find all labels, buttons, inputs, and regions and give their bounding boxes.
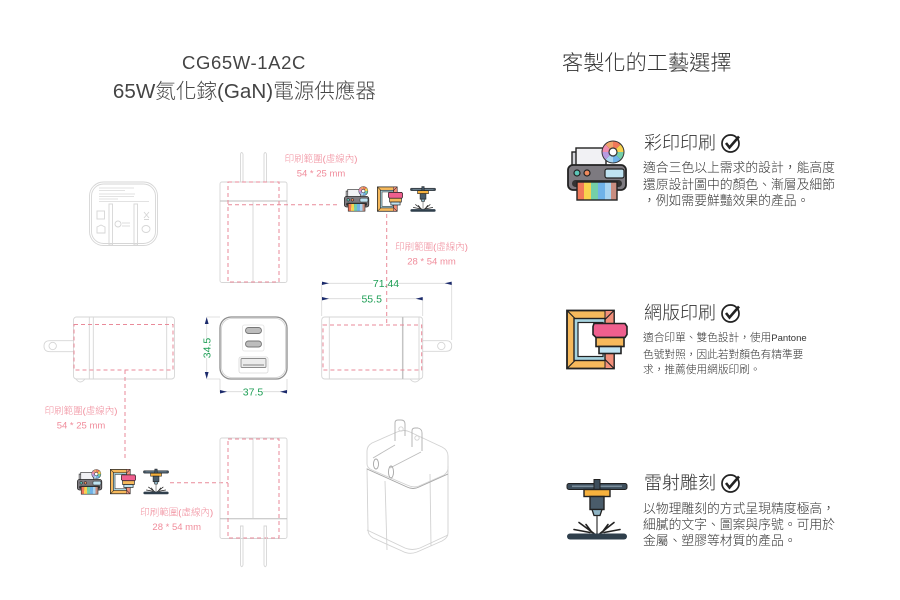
icon: laser <box>567 480 627 540</box>
heading: screen printing: 網版印刷 <box>644 303 716 323</box>
dimension: width 37.5: 37.5 <box>243 386 263 398</box>
icon: screen frame small <box>377 187 403 211</box>
print-area label: bottom view <box>140 506 213 533</box>
description: color printing: ，例如需要鮮豔效果的產品。 <box>643 193 809 208</box>
icon: check badge <box>722 475 739 492</box>
print-area label: left side view: 印刷範圍(虛線內) <box>45 405 117 417</box>
icons: print methods, bottom group <box>77 469 169 494</box>
print-area label: top view: 54 * 25 mm <box>297 168 345 180</box>
title: product model <box>113 52 376 103</box>
icon: laser small <box>410 186 436 212</box>
drawing: bottom view with print area <box>220 438 287 567</box>
icon: printer <box>568 140 626 200</box>
description: screen printing: 適合印單、雙色設計，使用Pantone <box>643 331 807 344</box>
dimension: height 34.5: 34.5 <box>202 338 214 358</box>
icon: screen frame small lower <box>110 469 136 494</box>
description: laser engraving: 細膩的文字、圖案與序號。可用於 <box>643 517 835 532</box>
title: product model: CG65W-1A2C <box>182 52 306 73</box>
description: screen printing <box>643 331 807 376</box>
drawing: output ports front view <box>220 317 287 379</box>
print-area label: right side view: 印刷範圍(虛線內) <box>395 241 468 253</box>
icon: printer small <box>344 186 369 211</box>
dimension: length 55.5 <box>322 294 423 316</box>
print-area label: bottom view: 28 * 54 mm <box>152 522 201 533</box>
heading: laser engraving: 雷射雕刻 <box>644 473 716 493</box>
dimension: length 55.5: 55.5 <box>361 294 382 306</box>
description: color printing: 適合三色以上需求的設計，能高度 <box>643 160 835 175</box>
drawing: top view with print area <box>220 152 287 282</box>
panel: color printing <box>568 133 835 208</box>
icon: check badge <box>722 135 739 152</box>
leader line: icons to right side view <box>386 214 388 325</box>
icon: printer small lower <box>77 469 102 494</box>
heading: customization options: 客製化的工藝選擇 <box>562 51 732 75</box>
panel: laser engraving <box>567 473 835 548</box>
dimension: length 71.44: 71.44 <box>373 278 399 290</box>
icon: laser small lower <box>143 469 169 494</box>
drawing: plug face view <box>90 182 158 246</box>
print-area label: top view <box>285 153 357 180</box>
description: color printing <box>643 160 835 208</box>
icon: screen frame <box>567 310 627 368</box>
drawing: left side view with print area <box>44 317 174 382</box>
panel: screen printing <box>567 303 807 376</box>
title: product model: 65W氮化鎵(GaN)電源供應器 <box>113 80 376 103</box>
drawing: isometric charger <box>367 420 448 553</box>
heading: color printing: 彩印印刷 <box>644 133 716 153</box>
description: screen printing: 求，推薦使用網版印刷。 <box>643 363 761 376</box>
print-area label: bottom view: 印刷範圍(虛線內) <box>140 506 213 518</box>
print-area label: left side view <box>45 405 117 432</box>
print-area label: left side view: 54 * 25 mm <box>57 420 105 432</box>
print-area label: right side view: 28 * 54 mm <box>407 256 456 268</box>
print-area label: right side view <box>395 241 468 268</box>
leader line: icons to bottom view <box>170 482 228 484</box>
leader line: left side view to icons <box>124 370 126 458</box>
drawing: right side view with print area <box>322 317 452 382</box>
icons: print methods, top group <box>344 186 436 212</box>
print-area label: top view: 印刷範圍(虛線內) <box>285 153 357 165</box>
dimension: length 71.44 <box>322 278 452 340</box>
description: laser engraving <box>643 501 835 548</box>
description: screen printing: 色號對照，因此若對顏色有精準要 <box>643 348 804 361</box>
description: laser engraving: 以物理雕刻的方式呈現精度極高， <box>643 501 835 516</box>
leader line: top view to icons <box>228 204 338 206</box>
description: laser engraving: 金屬、塑膠等材質的產品。 <box>643 533 797 548</box>
description: color printing: 還原設計圖中的顏色、漸層及細節 <box>643 177 835 192</box>
dimension: width 37.5 <box>220 379 287 398</box>
dimension: height 34.5 <box>202 317 220 379</box>
icon: check badge <box>722 305 739 322</box>
